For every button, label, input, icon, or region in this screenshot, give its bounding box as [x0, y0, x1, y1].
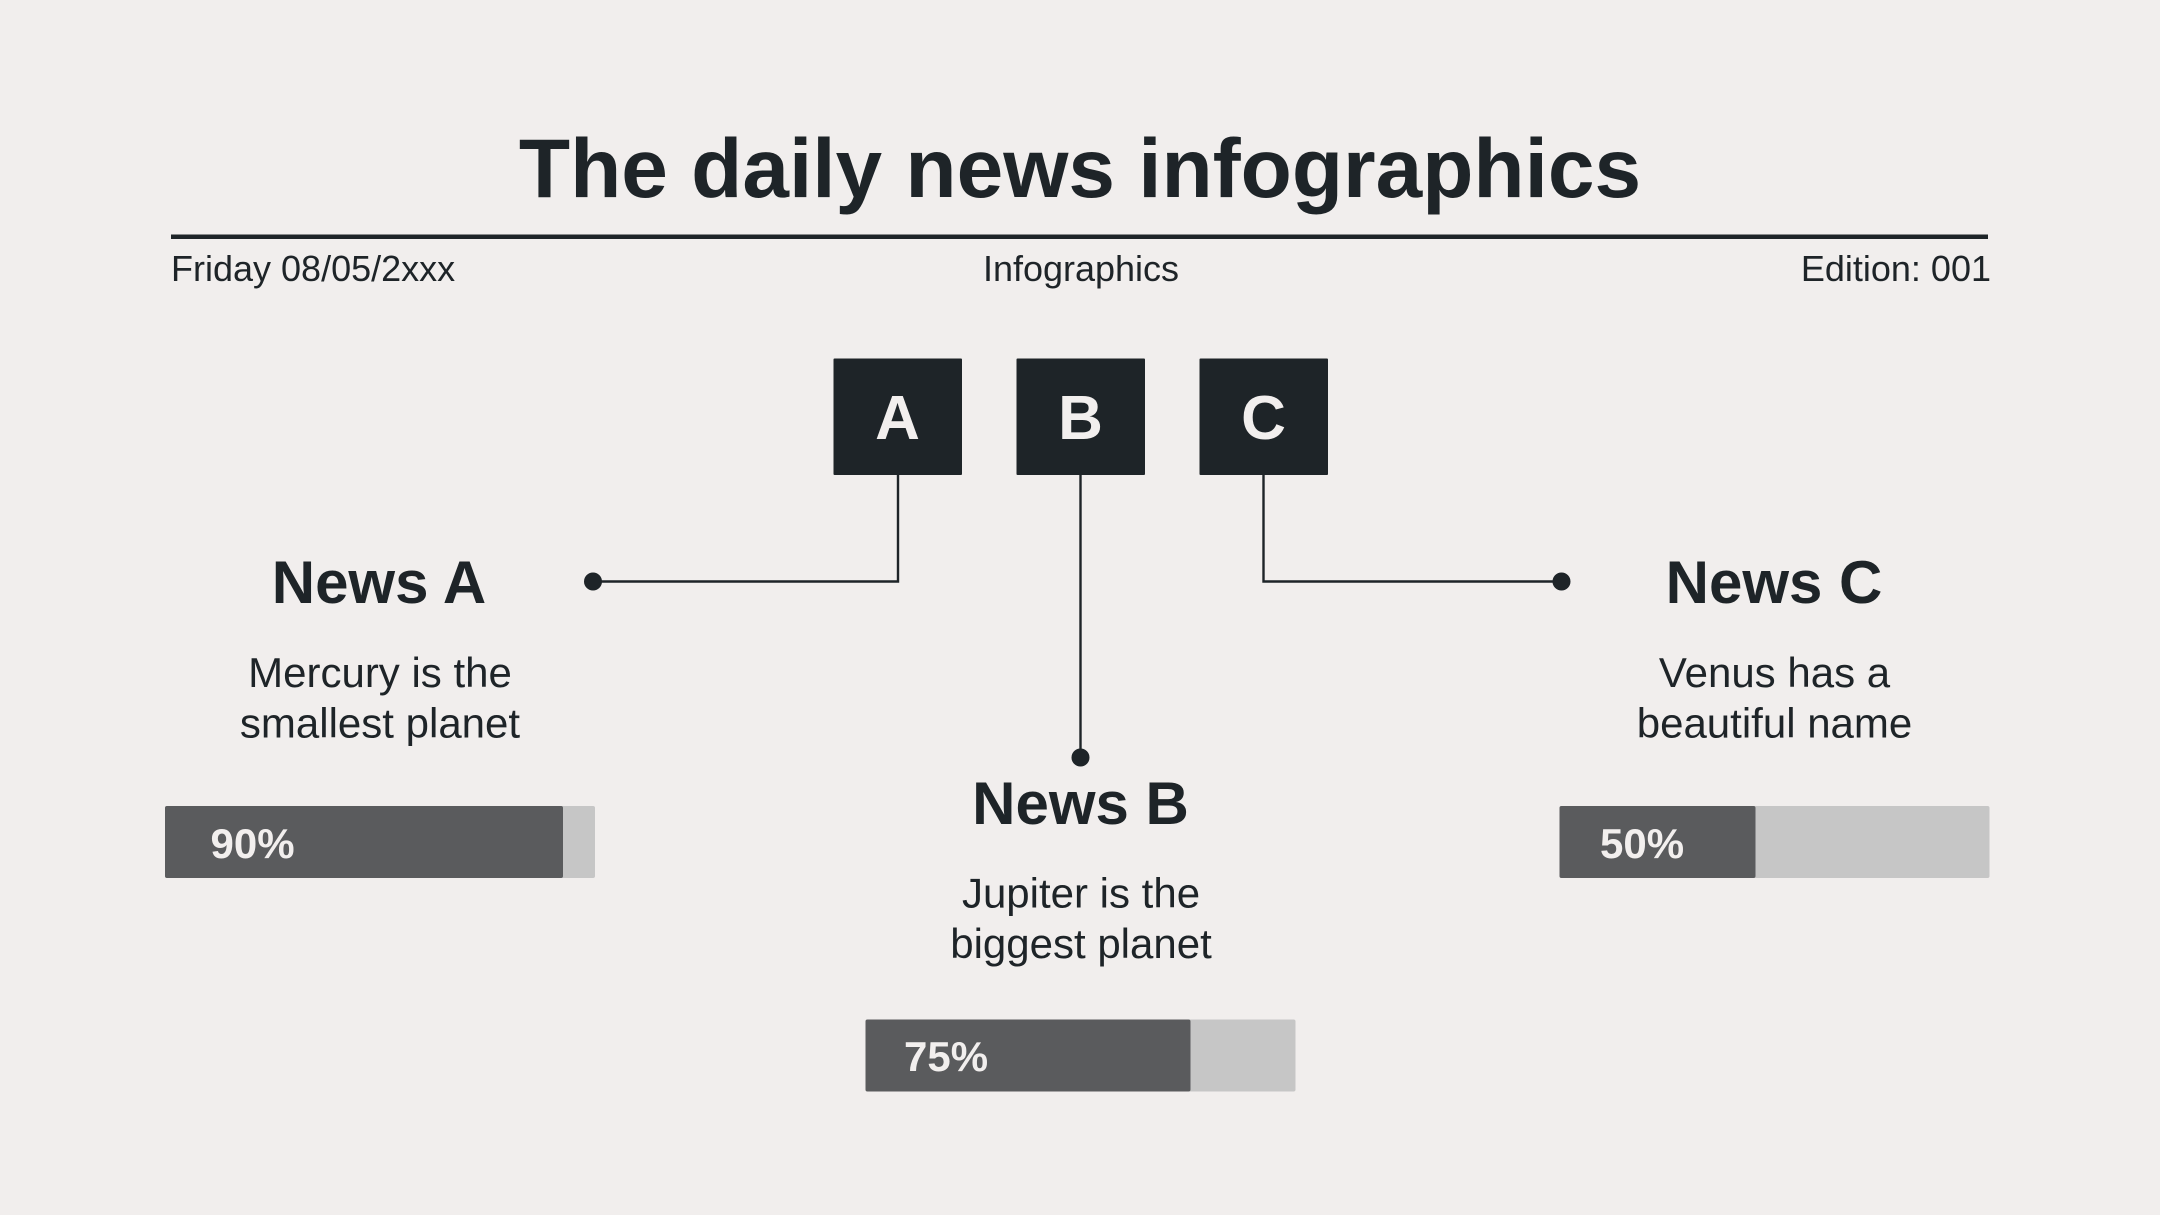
tab C: C	[1241, 384, 1286, 453]
heading: News A	[272, 549, 486, 616]
tab C	[1200, 358, 1328, 475]
description: biggest planet	[950, 920, 1212, 967]
connector A	[584, 475, 898, 590]
heading: News C	[1666, 549, 1882, 616]
description: smallest planet	[240, 700, 520, 746]
edition: Edition: 001	[1801, 248, 1991, 289]
progress bar 75%	[866, 1020, 1296, 1092]
title: The daily news infographics	[519, 121, 1641, 215]
progress bar 50%: 50%	[1600, 820, 1684, 867]
heading: News B	[972, 770, 1189, 837]
description: beautiful name	[1637, 700, 1912, 746]
tab A: A	[875, 384, 920, 453]
panel: News C	[1560, 549, 1990, 878]
tab B	[1016, 358, 1145, 475]
panel: News B	[866, 770, 1296, 1092]
panel: News A	[165, 549, 595, 878]
description: Jupiter is the	[962, 870, 1200, 916]
date: Friday 08/05/2xxx	[171, 248, 455, 289]
progress bar 50%	[1560, 806, 1990, 878]
description: Venus has a	[1659, 649, 1891, 696]
progress bar 90%	[165, 806, 595, 878]
connector C	[1264, 475, 1570, 590]
progress bar 75%: 75%	[904, 1033, 988, 1080]
section label: Infographics	[983, 248, 1179, 289]
tab A	[834, 358, 962, 475]
progress bar 90%: 90%	[210, 820, 295, 867]
connector B	[1072, 475, 1090, 766]
description: Mercury is the	[248, 649, 512, 696]
tab B: B	[1058, 384, 1103, 453]
